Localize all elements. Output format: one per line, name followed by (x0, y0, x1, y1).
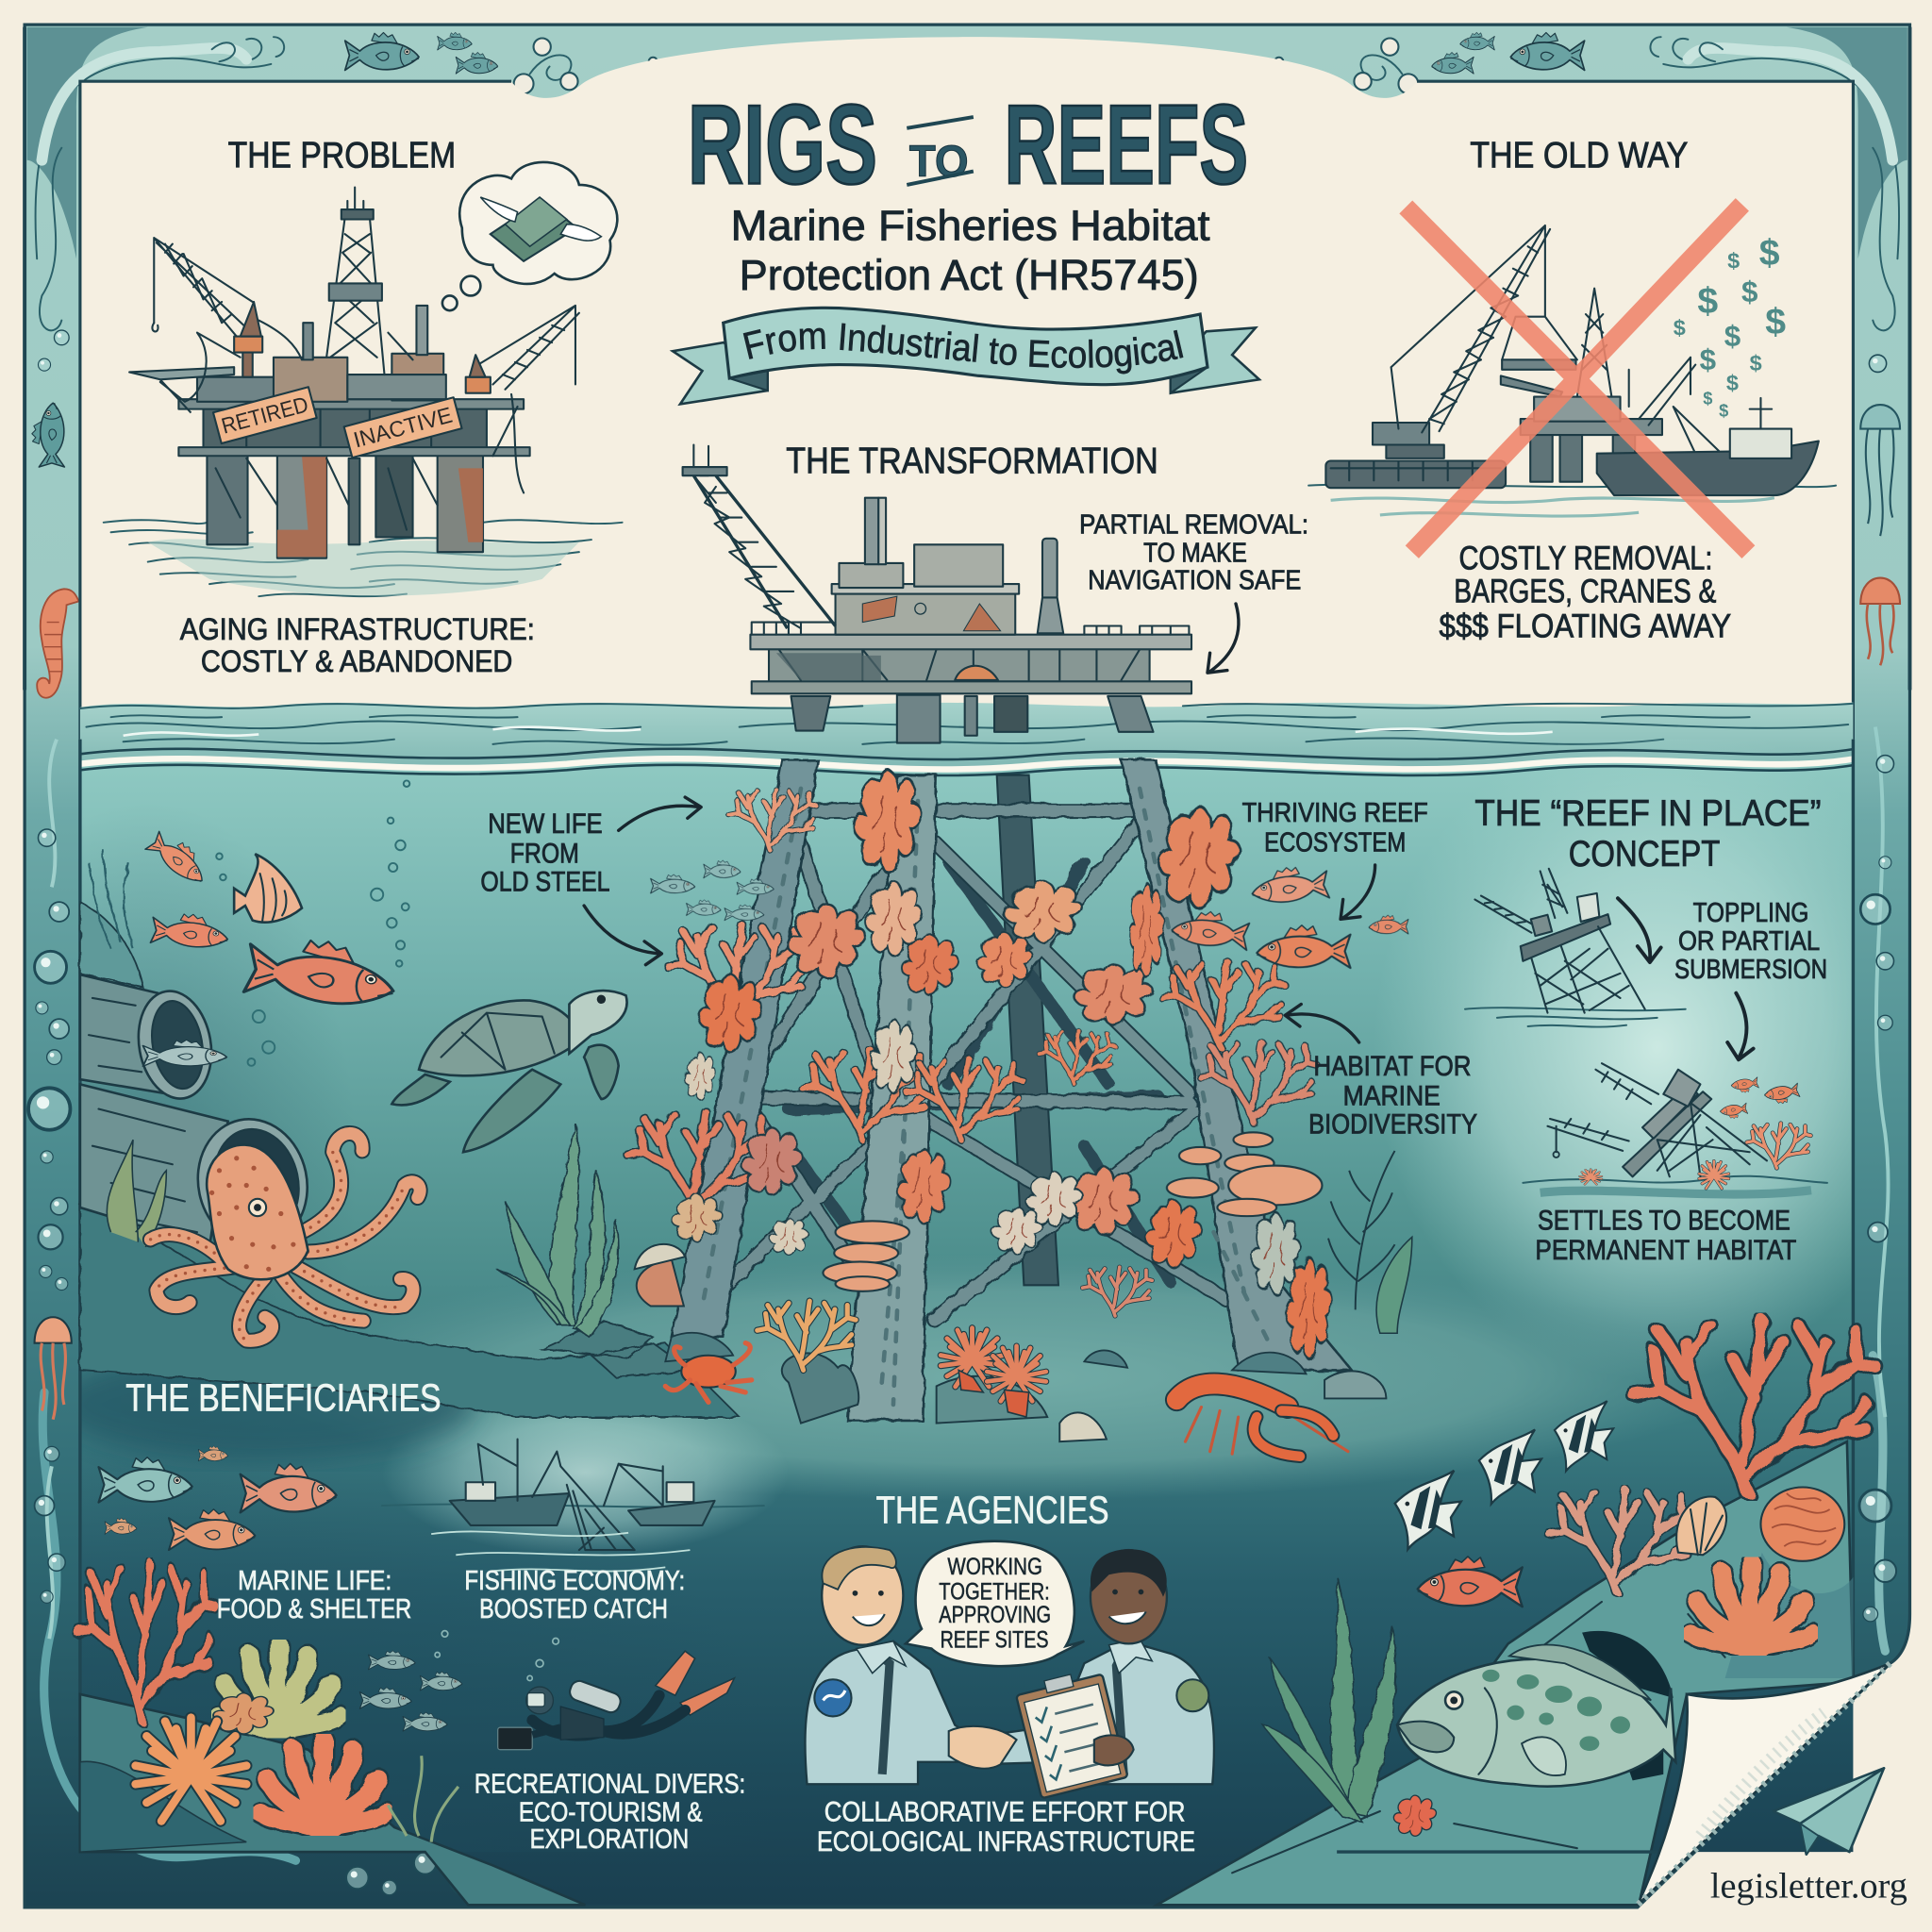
icon: floating dollars (1674, 233, 1786, 420)
coral: pink tube cluster (260, 1739, 386, 1831)
icon: floating dollars: $ (1759, 233, 1780, 274)
callout: toppling or partial submersion (1674, 898, 1827, 985)
panel: the beneficiaries (98, 1376, 764, 1855)
callout: habitat for marine biodiversity: MARINE (1343, 1081, 1441, 1112)
title: rigs to reefs: RIGS (688, 82, 877, 208)
icon: red cross-out (1406, 205, 1748, 552)
caption: collaborative effort (817, 1796, 1195, 1857)
derrick (326, 188, 385, 375)
frame inner rule lower (80, 740, 1853, 1852)
illustration: partially removed rig above water (683, 445, 1191, 743)
school of orange fish upper left (145, 826, 399, 1012)
icon: floating dollars: $ (1724, 320, 1740, 353)
callout: new life from old steel: OLD STEEL (480, 866, 610, 897)
anemone: orange (136, 1718, 246, 1821)
heading: reef in place (1474, 793, 1821, 874)
caption: settles to become permanent habitat: SETTLES TO BECOME (1538, 1206, 1790, 1237)
subtitle (731, 202, 1210, 299)
illustration: scuba diver (435, 1631, 734, 1750)
caption: aging infrastructure: COSTLY & ABANDONED (201, 643, 512, 678)
heading: the old way: THE OLD WAY (1470, 136, 1688, 176)
seaweed left of tower (496, 1124, 618, 1337)
callout: new life from old steel: NEW LIFE (488, 808, 603, 840)
orange tube coral right (1690, 1562, 1811, 1651)
callout: toppling or partial submersion: TOPPLING (1693, 898, 1808, 928)
caption: fishing economy (464, 1566, 685, 1624)
icon: handshake (949, 1726, 1017, 1769)
icon: paper plane (1774, 1768, 1884, 1855)
icon: floating dollars: $ (1727, 249, 1740, 274)
caption: recreational divers (475, 1769, 745, 1855)
callout: partial removal: NAVIGATION SAFE (1088, 565, 1301, 595)
big coral bottom right (1633, 1322, 1876, 1492)
illustration: derelict rig (104, 188, 623, 596)
icon: floating dollars: $ (1700, 343, 1716, 376)
icon: jellyfish pale right (1860, 405, 1900, 536)
heading: the agencies: THE AGENCIES (876, 1488, 1109, 1531)
crane left (154, 238, 253, 337)
thought cloud with winged money (442, 162, 617, 310)
callout: new life from old steel (480, 808, 610, 897)
icon: border fish group right (1432, 32, 1585, 74)
left rocky seabed and pipes area (80, 850, 740, 1417)
cream inner panel (80, 37, 1853, 740)
icon: floating dollars: $ (1765, 302, 1786, 342)
seabed life (635, 1151, 1412, 1441)
figure: right officer (974, 1549, 1214, 1784)
title: rigs to reefs (688, 82, 1248, 208)
caption: marine life (217, 1566, 411, 1624)
illustration: removal barges and cranes (1308, 225, 1836, 516)
callout: thriving reef ecosystem: THRIVING REEF (1242, 798, 1428, 828)
speech bubble: TOGETHER: (939, 1579, 1050, 1605)
caption: collaborative effort: ECOLOGICAL INFRASTRUCTURE (817, 1826, 1195, 1857)
panel: title block (670, 82, 1262, 406)
small fish among the tower (651, 860, 774, 921)
bottom left reef (76, 1566, 585, 1905)
figure: left officer (805, 1546, 974, 1784)
illustration: toppling rig (1465, 869, 1686, 1027)
subtitle: Marine Fisheries Habitat (731, 202, 1210, 250)
illustration: fishing boats with net (382, 1440, 764, 1572)
arrow: habitat (1285, 1004, 1359, 1042)
panel: the agencies (805, 1488, 1214, 1857)
illustration: small silver fish (359, 1651, 462, 1731)
reef fish right of tower (1171, 863, 1408, 968)
page curl corner (1638, 1663, 1890, 1905)
caption: costly removal: BARGES, CRANES & (1454, 574, 1716, 610)
caption: fishing economy: FISHING ECONOMY: (464, 1566, 685, 1596)
corals on tower (628, 771, 1332, 1358)
panel: the reef in place concept (1465, 793, 1827, 1266)
speech bubble: REEF SITES (941, 1627, 1049, 1653)
title: rigs to reefs: REEFS (1004, 82, 1248, 208)
caption: collaborative effort: COLLABORATIVE EFFORT FOR (824, 1796, 1185, 1827)
icon: floating dollars: $ (1703, 388, 1712, 408)
upper left pipe with fish (80, 974, 226, 1105)
callout: partial removal: TO MAKE (1143, 539, 1247, 569)
speech bubble: WORKING (947, 1555, 1042, 1580)
speech bubble (906, 1541, 1084, 1666)
icon: floating dollars: $ (1726, 371, 1739, 395)
callout: habitat for marine biodiversity: HABITAT FOR (1313, 1051, 1472, 1082)
caption: settles to become permanent habitat: PERMANENT HABITAT (1535, 1235, 1796, 1266)
seaweed: thin (388, 1756, 458, 1842)
coral: small orange blob (213, 1693, 274, 1734)
caption: recreational divers: RECREATIONAL DIVERS: (475, 1769, 745, 1799)
subtitle: Protection Act (HR5745) (740, 251, 1199, 299)
coral: red branching (76, 1566, 216, 1720)
icon: jellyfish orange right (1860, 578, 1900, 665)
icon: floating dollars: $ (1674, 315, 1686, 340)
caption: aging infrastructure (180, 611, 535, 678)
pale branch coral (1549, 1491, 1693, 1592)
lower left pipe (80, 1084, 319, 1257)
icon: floating dollars: $ (1741, 275, 1757, 308)
callout: habitat for marine biodiversity (1308, 1051, 1477, 1141)
callout: toppling or partial submersion: OR PARTIAL (1678, 926, 1820, 957)
underwater scene background (81, 740, 1853, 1853)
icon: floating dollars: $ (1750, 351, 1762, 375)
angelfish trio (1386, 1391, 1619, 1558)
illustration: settled rig habitat (1523, 1063, 1827, 1194)
caption: recreational divers: ECO-TOURISM & (519, 1797, 702, 1827)
callout: thriving reef ecosystem: ECOSYSTEM (1264, 828, 1406, 858)
caption: recreational divers: EXPLORATION (530, 1824, 689, 1855)
callout: toppling or partial submersion: SUBMERSION (1674, 955, 1827, 985)
caption: costly removal: $$$ FLOATING AWAY (1440, 608, 1731, 644)
panel: the problem (104, 136, 623, 678)
caption: marine life: MARINE LIFE: (238, 1566, 391, 1596)
water surface band (80, 702, 1853, 789)
sign: inactive: INACTIVE (351, 403, 455, 452)
caption: aging infrastructure: AGING INFRASTRUCTURE: (180, 611, 535, 646)
icon: border fish vertical (32, 403, 64, 467)
panel: the transformation (683, 441, 1308, 743)
heading: reef in place: THE “REEF IN PLACE” (1474, 793, 1821, 834)
red fish right (1418, 1557, 1523, 1607)
small starfish (1393, 1795, 1436, 1836)
icon: border fish group left (345, 32, 498, 74)
shell (1676, 1497, 1726, 1555)
icon: floating dollars: $ (1719, 400, 1728, 420)
callout: thriving reef ecosystem (1242, 798, 1428, 858)
sea turtle (391, 991, 627, 1152)
caption: costly removal: COSTLY REMOVAL: (1458, 540, 1713, 576)
caption: settles to become permanent habitat (1535, 1206, 1796, 1266)
brand: legisletter.org: legisletter.org (1710, 1866, 1907, 1906)
caption: costly removal (1440, 540, 1731, 644)
bubbles column (216, 780, 409, 1066)
tower jacket structure (672, 760, 1352, 1421)
shelf fungi on tower (823, 1132, 1322, 1291)
speech bubble: APPROVING (939, 1603, 1051, 1628)
sign: retired: RETIRED (219, 391, 311, 439)
panel: the old way (1308, 136, 1836, 644)
lobster (1176, 1384, 1348, 1457)
heading: the beneficiaries: THE BENEFICIARIES (125, 1376, 441, 1420)
crane right (478, 306, 579, 390)
caption: fishing economy: BOOSTED CATCH (479, 1594, 668, 1624)
icon: clipboard (1014, 1667, 1128, 1798)
icon: floating dollars: $ (1697, 281, 1718, 322)
brain coral (1760, 1487, 1844, 1561)
ribbon banner (670, 306, 1262, 406)
heading: reef in place: CONCEPT (1569, 834, 1720, 874)
arrow: to the deck (1208, 604, 1239, 673)
border bubbles (28, 330, 1896, 1896)
callout: partial removal (1079, 510, 1308, 595)
tall seaweed (1263, 1577, 1395, 1821)
arrows: new life (584, 797, 701, 965)
title: rigs to reefs: TO (909, 136, 969, 186)
crab (665, 1343, 752, 1402)
ribbon banner: From Industrial to Ecological (743, 323, 1183, 374)
coral: olive tube (218, 1644, 340, 1734)
caption: marine life: FOOD & SHELTER (217, 1594, 411, 1624)
callout: new life from old steel: FROM (510, 838, 579, 869)
illustration: marine life fish (98, 1446, 337, 1550)
icon: seahorse (37, 589, 79, 698)
callout: partial removal: PARTIAL REMOVAL: (1079, 510, 1308, 541)
arrows: toppling (1618, 898, 1754, 1059)
arrow: thriving reef (1341, 865, 1375, 919)
bottom right reef rock (1157, 1441, 1853, 1905)
grouper (1397, 1644, 1675, 1787)
icon: jellyfish orange left (35, 1317, 72, 1420)
heading: the problem: THE PROBLEM (228, 136, 456, 176)
callout: habitat for marine biodiversity: BIODIVERSITY (1308, 1109, 1477, 1141)
heading: the transformation: THE TRANSFORMATION (786, 441, 1158, 482)
octopus (150, 1133, 420, 1341)
